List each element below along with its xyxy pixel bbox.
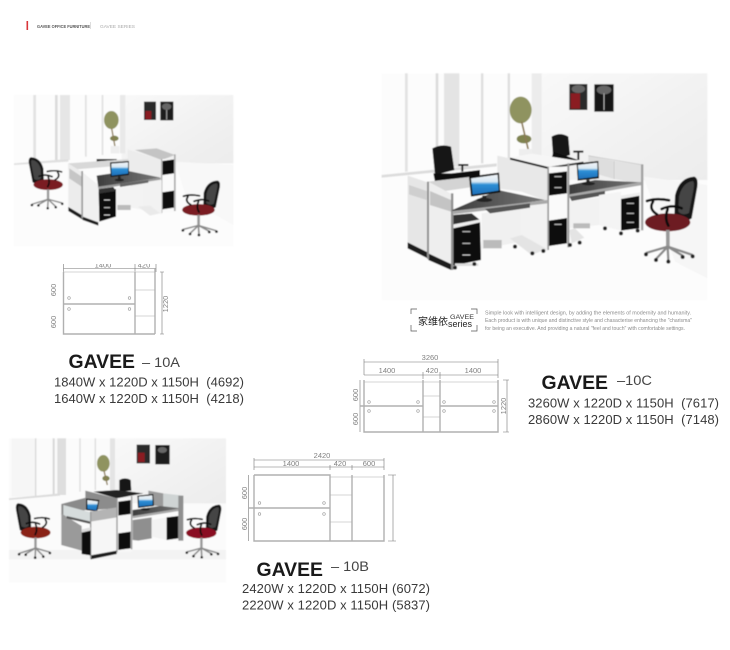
dimension labels 10B: 1400	[283, 459, 299, 468]
dimension labels 10B: 600	[363, 459, 375, 468]
dimension labels 10C: 1400	[379, 366, 395, 375]
dimension labels 10A: 1400	[95, 260, 111, 270]
spec list: 10A	[54, 374, 244, 406]
logo: brand mark in brackets: GAVEE	[450, 315, 474, 321]
text block: series description: Each product is with unique and distinctive style and chasacterise enhancing the "charisma"	[485, 318, 692, 324]
dimension labels 10C: 1220	[499, 398, 508, 414]
spec list: 10B: 2420W x 1220D x 1150H (6072)	[242, 581, 430, 596]
drawing: 10B floor plan	[240, 451, 396, 541]
dimension labels 10C: 3260	[422, 353, 438, 362]
title: GAVEE 10A: GAVEE	[68, 352, 135, 373]
photo: GAVEE 10B workstation	[9, 438, 226, 583]
dimension labels 10A	[49, 260, 170, 328]
spec list: 10C: 3260W x 1220D x 1150H (7617)	[528, 396, 719, 410]
dimension labels 10A: 600	[49, 316, 58, 328]
dimension labels 10C: 600	[351, 389, 360, 401]
text block: series description: Simple look with intelligent design, by adding the elements of modernity and humanity.	[485, 310, 691, 316]
photo: GAVEE 10C workstation	[382, 73, 707, 300]
header bar	[26, 21, 135, 30]
logo: brand mark in brackets: series	[448, 319, 472, 329]
title: GAVEE 10B: GAVEE	[256, 560, 323, 581]
dimension labels 10C: 600	[351, 413, 360, 425]
header bar: GAVEE SERIES	[100, 24, 135, 29]
title: GAVEE 10A	[68, 352, 180, 373]
dimension labels 10C: 1400	[465, 366, 481, 375]
spec list: 10C	[528, 396, 719, 427]
logo: brand mark in brackets: 家维依	[418, 315, 448, 328]
spec list: 10A: 1640W x 1220D x 1150H (4218)	[54, 391, 244, 406]
dimension labels 10A: 600	[49, 284, 58, 296]
photo: GAVEE 10A workstation	[14, 95, 233, 247]
logo: brand mark in brackets	[411, 309, 477, 331]
title: GAVEE 10C	[542, 373, 652, 394]
title: GAVEE 10C: –10C	[617, 373, 652, 388]
header bar: GAVEE OFFICE FURNITURE	[37, 24, 90, 29]
spec list: 10A: 1840W x 1220D x 1150H (4692)	[54, 374, 244, 390]
dimension labels 10B: 600	[240, 518, 249, 530]
spec list: 10B: 2220W x 1220D x 1150H (5837)	[242, 598, 430, 612]
title: GAVEE 10A: – 10A	[142, 355, 180, 370]
dimension labels 10B: 600	[240, 487, 249, 499]
dimension labels 10C	[351, 353, 508, 425]
drawing: 10A floor plan	[49, 260, 170, 334]
title: GAVEE 10B	[256, 559, 369, 581]
caption: brand logo and description	[411, 309, 692, 332]
text block: series description: for being an executive. And providing a natural "feel and touch" with comfortable settings.	[485, 326, 685, 332]
dimension labels 10B	[240, 451, 375, 530]
drawing: 10C floor plan	[351, 353, 509, 432]
title: GAVEE 10B: – 10B	[331, 559, 369, 574]
title: GAVEE 10C: GAVEE	[542, 373, 608, 394]
dimension labels 10A: 420	[138, 260, 150, 270]
dimension labels 10B: 420	[334, 459, 346, 468]
dimension labels 10C: 420	[426, 366, 438, 375]
text block: series description	[485, 310, 692, 332]
dimension labels 10A: 1220	[161, 296, 170, 312]
dimension labels 10B: 2420	[314, 451, 330, 460]
spec list: 10C: 2860W x 1220D x 1150H (7148)	[528, 412, 719, 427]
spec list: 10B	[242, 581, 430, 612]
